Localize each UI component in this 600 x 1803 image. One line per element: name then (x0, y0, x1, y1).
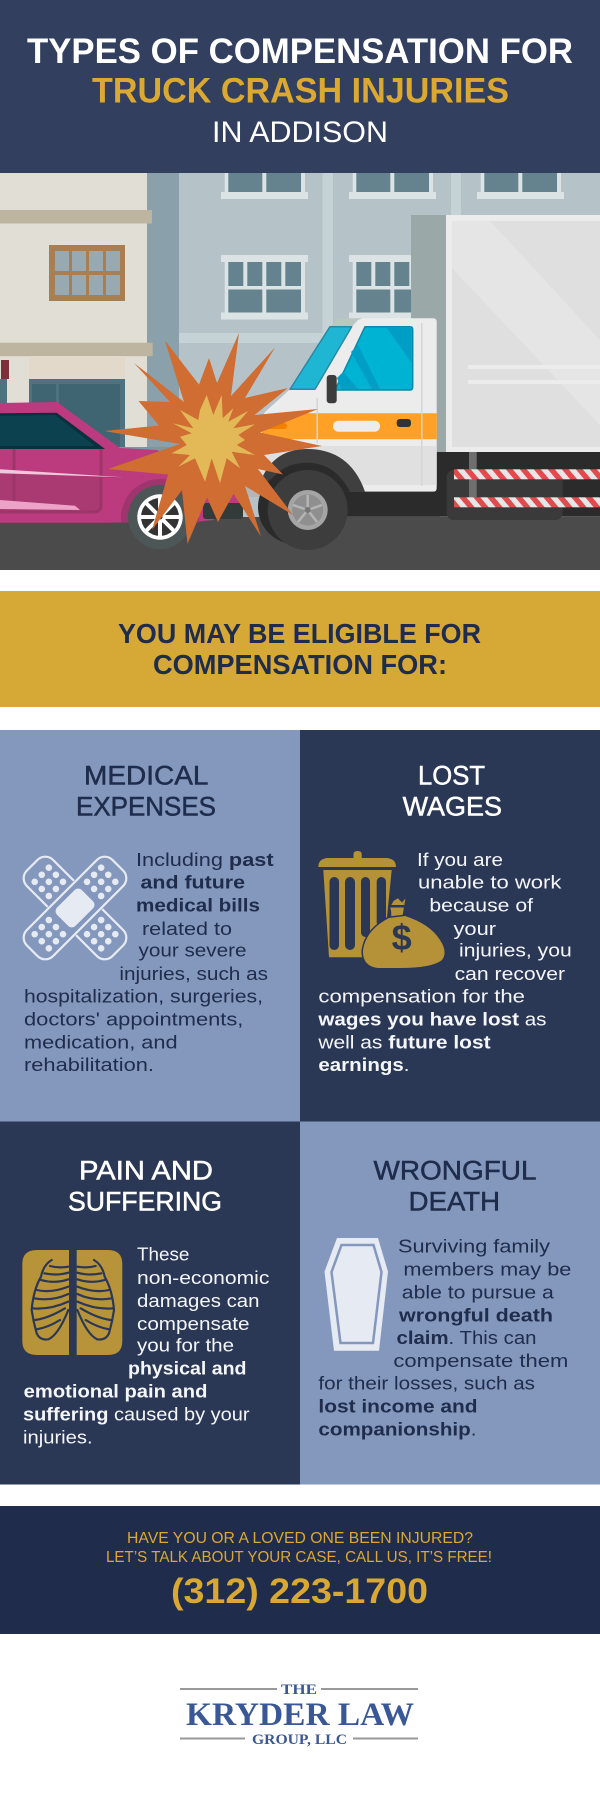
windshield (290, 327, 352, 389)
road (0, 517, 600, 570)
logo: GROUP, LLC (252, 1732, 347, 1748)
body text: physical and (128, 1358, 246, 1378)
body text: medical bills (136, 896, 260, 916)
body text: because of (429, 896, 534, 916)
heading: PAIN AND (79, 1155, 213, 1185)
heading (403, 760, 502, 821)
heading (68, 1155, 222, 1216)
shop front (0, 356, 183, 457)
eligibility banner (0, 591, 600, 707)
body text: suffering caused by your (23, 1405, 250, 1425)
car window (0, 413, 105, 449)
body text: injuries, such as (119, 964, 268, 984)
body text: non-economic (137, 1268, 269, 1288)
body text (318, 1237, 571, 1440)
phone number: (312) 223-1700 (171, 1572, 428, 1611)
body text: injuries, you (459, 941, 572, 961)
body text: compensate them (393, 1351, 568, 1371)
door handle (333, 421, 380, 432)
mirror (327, 375, 337, 403)
heading: MEDICAL (84, 760, 208, 790)
body text: wages you have lost as (317, 1010, 546, 1030)
call to action (0, 1506, 600, 1634)
beige building (0, 173, 183, 457)
heading: DEATH (409, 1186, 500, 1216)
panel: lost wages (300, 730, 600, 1122)
body text: emotional pain and (24, 1381, 207, 1401)
logo: KRYDER LAW (186, 1697, 414, 1733)
body text: able to pursue a (402, 1283, 555, 1303)
body text: unable to work (418, 873, 563, 893)
icon: trash can and money bag (318, 851, 445, 968)
body text: for their losses, such as (318, 1374, 535, 1394)
title line 1: TYPES OF COMPENSATION FOR (27, 32, 573, 71)
title line 2: TRUCK CRASH INJURIES (92, 72, 509, 110)
body text: rehabilitation. (24, 1055, 154, 1075)
call to action: HAVE YOU OR A LOVED ONE BEEN INJURED? (127, 1530, 473, 1547)
body text: lost income and (318, 1397, 478, 1417)
body text: These (137, 1245, 189, 1265)
car wheel (110, 479, 210, 563)
body text: your severe (138, 941, 246, 961)
eligibility banner: YOU MAY BE ELIGIBLE FOR (118, 618, 481, 649)
body text (317, 850, 572, 1075)
body text: damages can (137, 1291, 260, 1311)
window (49, 245, 125, 301)
heading: LOST (418, 760, 485, 790)
body text: wrongful death (398, 1306, 553, 1326)
front wheel (258, 449, 440, 550)
grey building (147, 173, 564, 463)
cab (245, 318, 437, 497)
body text: Including past (136, 850, 274, 870)
body text: your (454, 919, 496, 939)
heading (76, 760, 216, 821)
icon: coffin (324, 1238, 388, 1351)
body text: If you are (417, 850, 503, 870)
heading: SUFFERING (68, 1186, 222, 1216)
cargo box (411, 215, 600, 452)
icon: rib cage (22, 1250, 122, 1355)
eligibility banner: COMPENSATION FOR: (153, 649, 447, 680)
side window (335, 327, 413, 390)
logo (180, 1682, 418, 1748)
subtitle: IN ADDISON (212, 116, 388, 149)
panel: wrongful death (300, 1122, 600, 1484)
body text: well as future lost (317, 1033, 491, 1053)
body text: Surviving family (398, 1237, 550, 1257)
car (0, 402, 243, 563)
header panel (0, 0, 600, 173)
panel: pain and suffering (0, 1122, 300, 1484)
rear guard bars (454, 469, 600, 507)
body text: companionship . (318, 1420, 476, 1440)
heading: EXPENSES (76, 791, 216, 821)
logo: THE (281, 1682, 317, 1698)
heading: WAGES (403, 791, 502, 821)
heading: WRONGFUL (374, 1155, 536, 1185)
body text (23, 1245, 269, 1447)
body text: can recover (455, 964, 565, 984)
call to action: LET’S TALK ABOUT YOUR CASE, CALL US, IT’S FREE! (106, 1549, 492, 1566)
body text: injuries. (23, 1427, 93, 1447)
panel: medical expenses (0, 730, 300, 1122)
crash illustration (0, 173, 600, 570)
icon: bandage (18, 851, 132, 965)
money bag: $ (392, 917, 412, 958)
body text: claim . This can (396, 1328, 536, 1348)
body text: and future (140, 873, 245, 893)
chassis (300, 452, 600, 517)
body text: members may be (403, 1260, 571, 1280)
body text: medication, and (24, 1033, 178, 1053)
body text: compensate (137, 1314, 250, 1334)
body text: earnings . (318, 1055, 410, 1075)
body text: you for the (137, 1336, 234, 1356)
truck (245, 215, 600, 550)
heading (374, 1155, 536, 1216)
body text (24, 850, 274, 1075)
body text: doctors' appointments, (24, 1010, 243, 1030)
body text: compensation for the (318, 987, 525, 1007)
body text: hospitalization, surgeries, (24, 987, 263, 1007)
explosion (104, 333, 322, 544)
body text: related to (142, 919, 232, 939)
